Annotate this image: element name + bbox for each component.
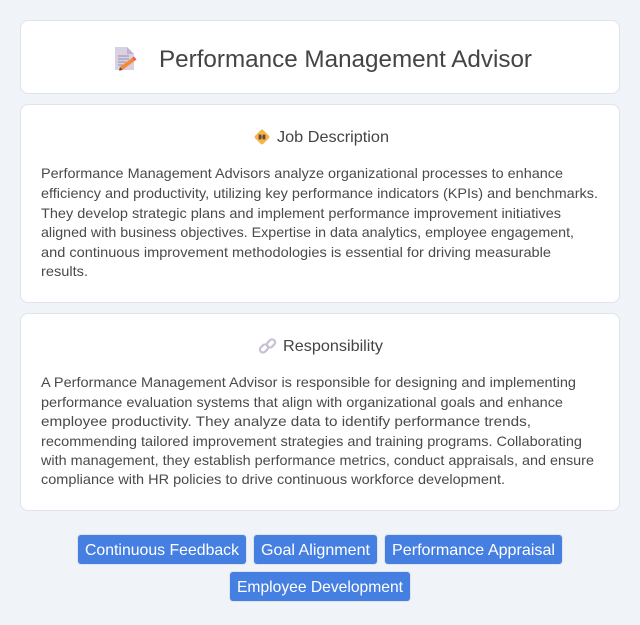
text: job description body [41, 165, 598, 279]
panel: responsibility [20, 313, 620, 511]
heading: title: Performance Management Advisor [159, 46, 532, 73]
text: job description body: Performance Management Advisors analyze organizational processes to enhance [41, 165, 563, 181]
icon: job diamond [254, 130, 270, 144]
tag: employee development: Employee Development [237, 579, 404, 596]
panel: title [20, 20, 620, 94]
text: job description body: efficiency and productivity, utilizing key performance indicators (KPIs) and benchmarks. [41, 185, 598, 201]
tag: goal alignment: Goal Alignment [261, 542, 371, 559]
heading: job description: Job Description [277, 129, 389, 146]
panel: job description [20, 104, 620, 303]
tag: employee development [230, 572, 410, 601]
text: job description body: They develop strategic plans and implement performance improvement initiatives [41, 205, 561, 221]
text: responsibility body [40, 374, 594, 487]
text: job description body: and continuous improvement methodologies is essential for driving measurable [41, 244, 551, 260]
text: responsibility body: with management, they establish performance metrics, conduct appraisals, and ensure [40, 452, 594, 468]
icon: document with pencil [115, 47, 136, 70]
text: responsibility body: A Performance Management Advisor is responsible for designing and implementing [41, 374, 576, 390]
text: job description body: results. [41, 263, 88, 279]
icon: chain link [258, 338, 276, 354]
tag: performance appraisal: Performance Appraisal [392, 542, 555, 559]
tag: goal alignment [254, 535, 377, 564]
text: responsibility body: employee productivity. They analyze data to identify performance trends, [41, 413, 531, 429]
tag: continuous feedback [78, 535, 246, 564]
text: responsibility body: performance evaluation systems that align with organizational goals and enhance [41, 394, 563, 410]
tag: continuous feedback: Continuous Feedback [85, 542, 240, 559]
heading: responsibility: Responsibility [283, 338, 383, 355]
text: job description body: aligned with business objectives. Expertise in data analytics, employee engagement, [41, 224, 574, 240]
tag: performance appraisal [385, 535, 562, 564]
text: responsibility body: recommending tailored improvement strategies and training programs. Collaborating [41, 433, 582, 449]
text: responsibility body: compliance with HR policies to drive continuous workforce development. [41, 471, 505, 487]
